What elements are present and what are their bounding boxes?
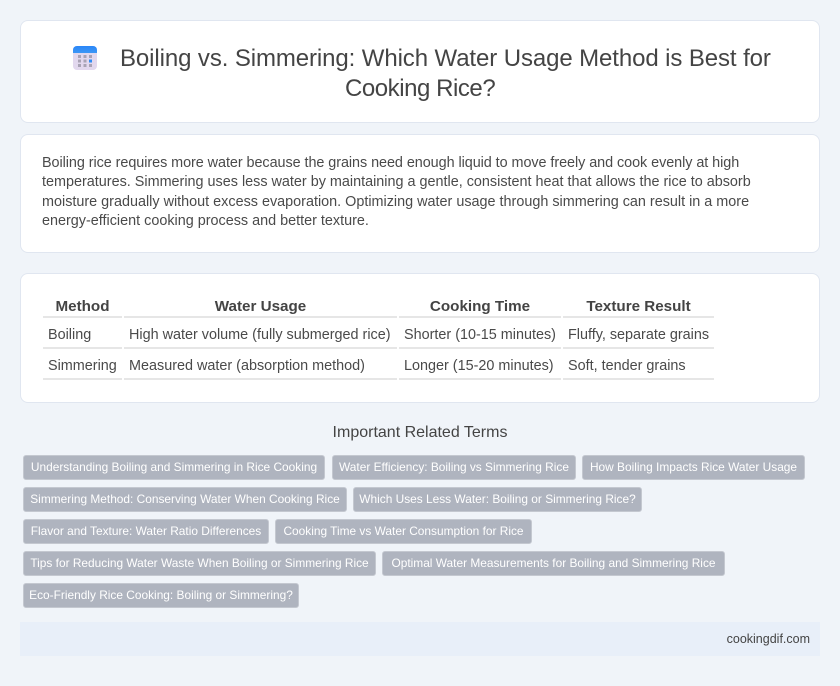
related terms tags: Water Efficiency: Boiling vs Simmering Rice bbox=[339, 460, 569, 474]
related terms tags: Understanding Boiling and Simmering in Rice Cooking bbox=[31, 460, 317, 474]
related terms tags: Optimal Water Measurements for Boiling and Simmering Rice bbox=[391, 556, 716, 570]
title: Cooking Rice? bbox=[345, 75, 495, 102]
intro text panel bbox=[20, 134, 820, 253]
title bbox=[120, 45, 771, 102]
related terms tags: Which Uses Less Water: Boiling or Simmering Rice? bbox=[359, 492, 636, 506]
related terms tags: Cooking Time vs Water Consumption for Rice bbox=[283, 524, 524, 538]
row: boiling: Boiling bbox=[48, 327, 91, 343]
row: boiling: Shorter (10-15 minutes) bbox=[404, 327, 556, 343]
comparison table bbox=[43, 298, 714, 380]
row: simmering: Longer (15-20 minutes) bbox=[404, 358, 554, 374]
row: simmering: Soft, tender grains bbox=[568, 358, 686, 374]
row: boiling bbox=[48, 327, 709, 343]
related terms tags: Flavor and Texture: Water Ratio Differences bbox=[31, 524, 261, 538]
title: Boiling vs. Simmering: Which Water Usage Method is Best for bbox=[120, 45, 771, 72]
footer bar bbox=[20, 622, 820, 656]
table header bbox=[56, 298, 691, 315]
intro paragraph: energy-efficient cooking process and better texture. bbox=[42, 213, 369, 229]
related terms tags: Eco-Friendly Rice Cooking: Boiling or Simmering? bbox=[29, 588, 293, 602]
row: boiling: Fluffy, separate grains bbox=[568, 327, 709, 343]
footer source text: cookingdif.com bbox=[727, 632, 810, 646]
icon: calendar bbox=[73, 46, 97, 70]
table header: Method bbox=[56, 298, 110, 315]
table header: Cooking Time bbox=[430, 298, 530, 315]
intro paragraph bbox=[42, 155, 751, 229]
row: simmering bbox=[48, 358, 686, 374]
comparison table panel bbox=[20, 273, 820, 403]
intro paragraph: temperatures. Simmering uses less water by maintaining a gentle, consistent heat that allows the rice to absorb bbox=[42, 174, 751, 190]
table header: Water Usage bbox=[215, 298, 306, 315]
header panel bbox=[20, 20, 820, 123]
related terms tags: Tips for Reducing Water Waste When Boiling or Simmering Rice bbox=[30, 556, 369, 570]
related terms tags: Simmering Method: Conserving Water When Cooking Rice bbox=[30, 492, 340, 506]
related terms heading: Important Related Terms bbox=[333, 424, 507, 441]
row: simmering: Measured water (absorption method) bbox=[129, 358, 365, 374]
row: boiling: High water volume (fully submerged rice) bbox=[129, 327, 391, 343]
related terms tags bbox=[23, 455, 805, 608]
intro paragraph: Boiling rice requires more water because the grains need enough liquid to move freely and cook evenly at high bbox=[42, 155, 739, 171]
table header: Texture Result bbox=[586, 298, 691, 315]
related terms tags: How Boiling Impacts Rice Water Usage bbox=[590, 460, 797, 474]
intro paragraph: moisture gradually without excess evaporation. Optimizing water usage through simmering can result in a more bbox=[42, 194, 749, 210]
row: simmering: Simmering bbox=[48, 358, 117, 374]
